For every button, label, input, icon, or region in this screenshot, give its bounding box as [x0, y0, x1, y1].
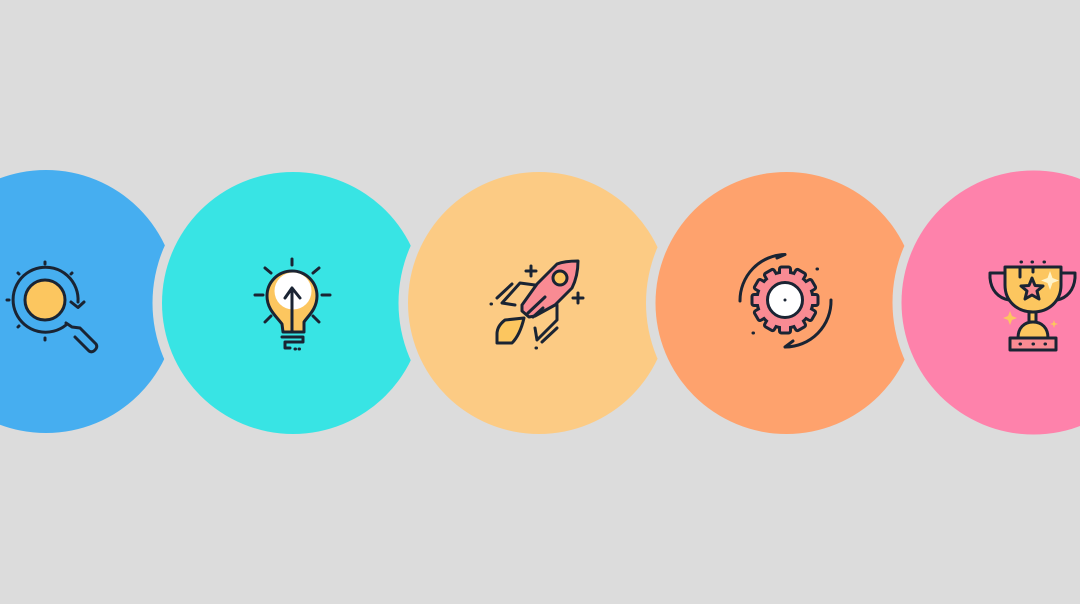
circle: cyan idea step — [162, 172, 424, 434]
icon: magnifying glass with refresh arrow — [7, 262, 97, 352]
circle: blue research step — [0, 170, 178, 433]
icon: light bulb with up arrow — [255, 259, 330, 349]
circle: light orange launch step — [408, 172, 670, 434]
icon: trophy with star — [990, 262, 1075, 350]
icon: rocket — [491, 261, 583, 348]
circle: orange settings step — [656, 172, 918, 434]
circle: pink achievement step — [902, 170, 1080, 434]
icon: gear with rotating arrows — [740, 254, 831, 347]
